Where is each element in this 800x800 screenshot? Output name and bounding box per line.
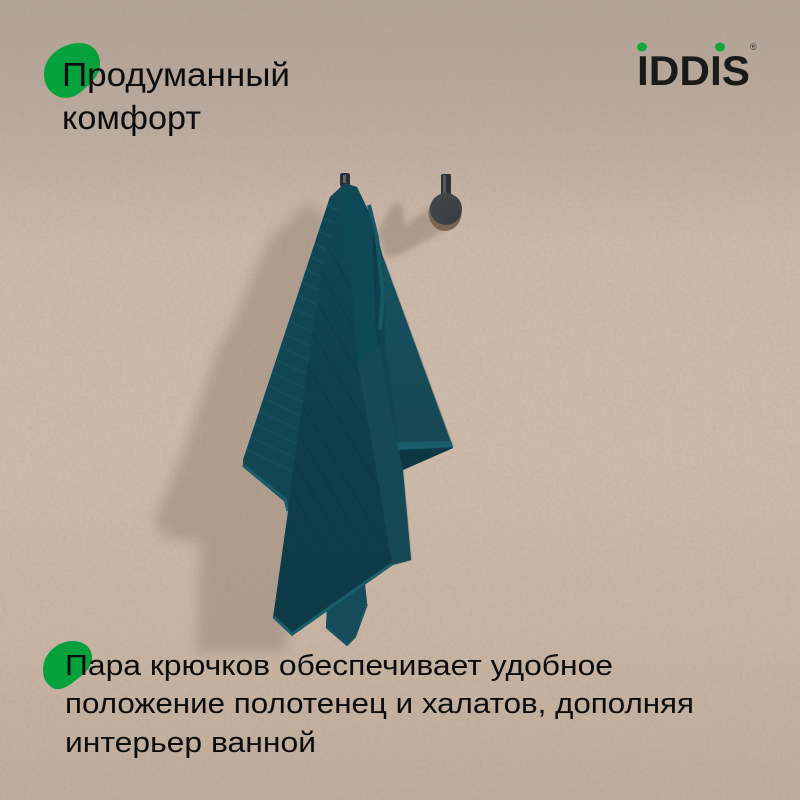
towel ribs, left <box>235 197 380 477</box>
hook: right <box>428 174 462 231</box>
towel soft fold on centre <box>345 188 378 362</box>
logo <box>637 42 757 94</box>
towel back hem, right <box>397 441 453 450</box>
towel back panel, right side <box>383 257 453 447</box>
hook: left, holding towel <box>340 173 350 187</box>
logo dots <box>637 42 725 52</box>
towel side hem, right <box>369 205 383 330</box>
towel hanging corner at bottom <box>326 584 367 646</box>
logo wordmark: IDDIS <box>637 47 750 94</box>
towel ribs, centre <box>265 225 395 775</box>
towel <box>242 183 454 646</box>
heading: Продуманный <box>62 56 290 93</box>
towel front hem <box>274 564 392 634</box>
towel left hem <box>243 465 288 511</box>
body blob <box>43 641 92 689</box>
body text: положение полотенец и халатов, дополняя <box>65 688 694 720</box>
towel corner hem <box>326 604 367 645</box>
towel left ribbed panel <box>243 190 345 502</box>
towel base silhouette <box>243 183 453 646</box>
hook shadow on wall <box>378 203 448 258</box>
heading: комфорт <box>62 99 201 136</box>
heading <box>62 56 290 136</box>
body text: Пара крючков обеспечивает удобное <box>65 650 613 682</box>
towel front centre panel <box>273 190 392 636</box>
towel shadow on wall <box>155 203 325 652</box>
body text: интерьер ванной <box>65 727 316 759</box>
towel dark fold shadow, right <box>368 215 392 420</box>
body text <box>65 650 694 759</box>
heading blob <box>44 43 100 98</box>
towel hanging lower panel <box>357 345 411 565</box>
logo registered mark: ® <box>750 42 757 52</box>
towel underside, right <box>399 448 453 470</box>
